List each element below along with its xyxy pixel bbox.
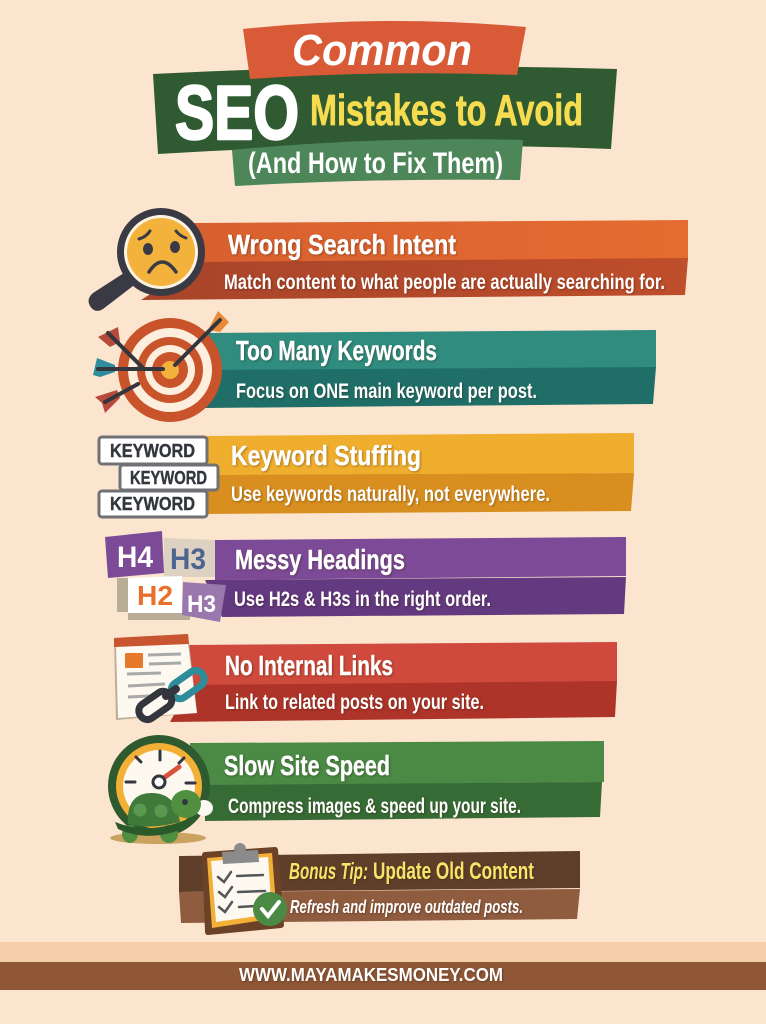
icon: heading tags: H2 (137, 580, 173, 611)
footer (0, 942, 766, 990)
heading: No Internal Links (225, 650, 393, 681)
icon: keyword tags (99, 437, 218, 517)
icon: keyword tags: KEYWORD (110, 441, 195, 461)
bar (179, 851, 580, 923)
bar (205, 433, 634, 514)
icon: document with chain link (114, 634, 207, 723)
icon: gauge and turtle (108, 735, 213, 844)
icon: target with arrows (93, 311, 229, 422)
footer light band (0, 942, 766, 962)
icon: heading tags: H3 (170, 543, 206, 576)
icon: sad magnifying glass (89, 208, 205, 311)
icon: heading tags: H4 (117, 541, 153, 574)
heading: Wrong Search Intent (228, 229, 456, 260)
heading: Mistakes to Avoid: Mistakes to Avoid (310, 86, 583, 135)
banner: light green subtitle (232, 139, 523, 186)
description: Link to related posts on your site. (225, 691, 484, 714)
bar (205, 537, 626, 617)
title banner (153, 21, 617, 186)
heading: SEO: SEO (175, 71, 299, 156)
heading: Common: Common (292, 26, 472, 75)
heading: Keyword Stuffing (231, 440, 421, 471)
bar (170, 642, 617, 722)
panel: messy headings (105, 531, 626, 622)
banner: dark green (153, 66, 617, 154)
heading: bonus tip: Bonus Tip: (289, 858, 368, 884)
description: Refresh and improve outdated posts. (290, 897, 523, 917)
description: Compress images & speed up your site. (228, 795, 521, 818)
description: Use keywords naturally, not everywhere. (231, 483, 550, 506)
panel: keyword stuffing (99, 433, 634, 517)
icon: heading tags: H3 (187, 591, 216, 618)
bar (205, 330, 656, 408)
description: Focus on ONE main keyword per post. (236, 380, 537, 403)
icon: heading tags (105, 531, 226, 622)
panel: slow site speed (108, 735, 604, 844)
heading: update old content: Update Old Content (373, 858, 534, 885)
heading: subtitle: (And How to Fix Them) (248, 147, 503, 180)
panel: too many keywords (93, 311, 656, 422)
footer brown band (0, 962, 766, 990)
bar (190, 741, 604, 821)
panel: wrong search intent (89, 208, 688, 311)
icon: clipboard with check (205, 843, 287, 932)
footer url: WWW.MAYAMAKESMONEY.COM (239, 965, 503, 985)
panel: bonus tip (179, 843, 580, 932)
heading: Messy Headings (235, 544, 405, 575)
icon: keyword tags: KEYWORD (130, 468, 207, 488)
heading: Too Many Keywords (236, 335, 437, 366)
panel: no internal links (114, 634, 617, 723)
bar (141, 220, 688, 300)
banner: red Common (243, 21, 526, 79)
heading: Slow Site Speed (224, 750, 390, 781)
description: Use H2s & H3s in the right order. (234, 588, 491, 611)
icon: keyword tags: KEYWORD (110, 494, 195, 514)
